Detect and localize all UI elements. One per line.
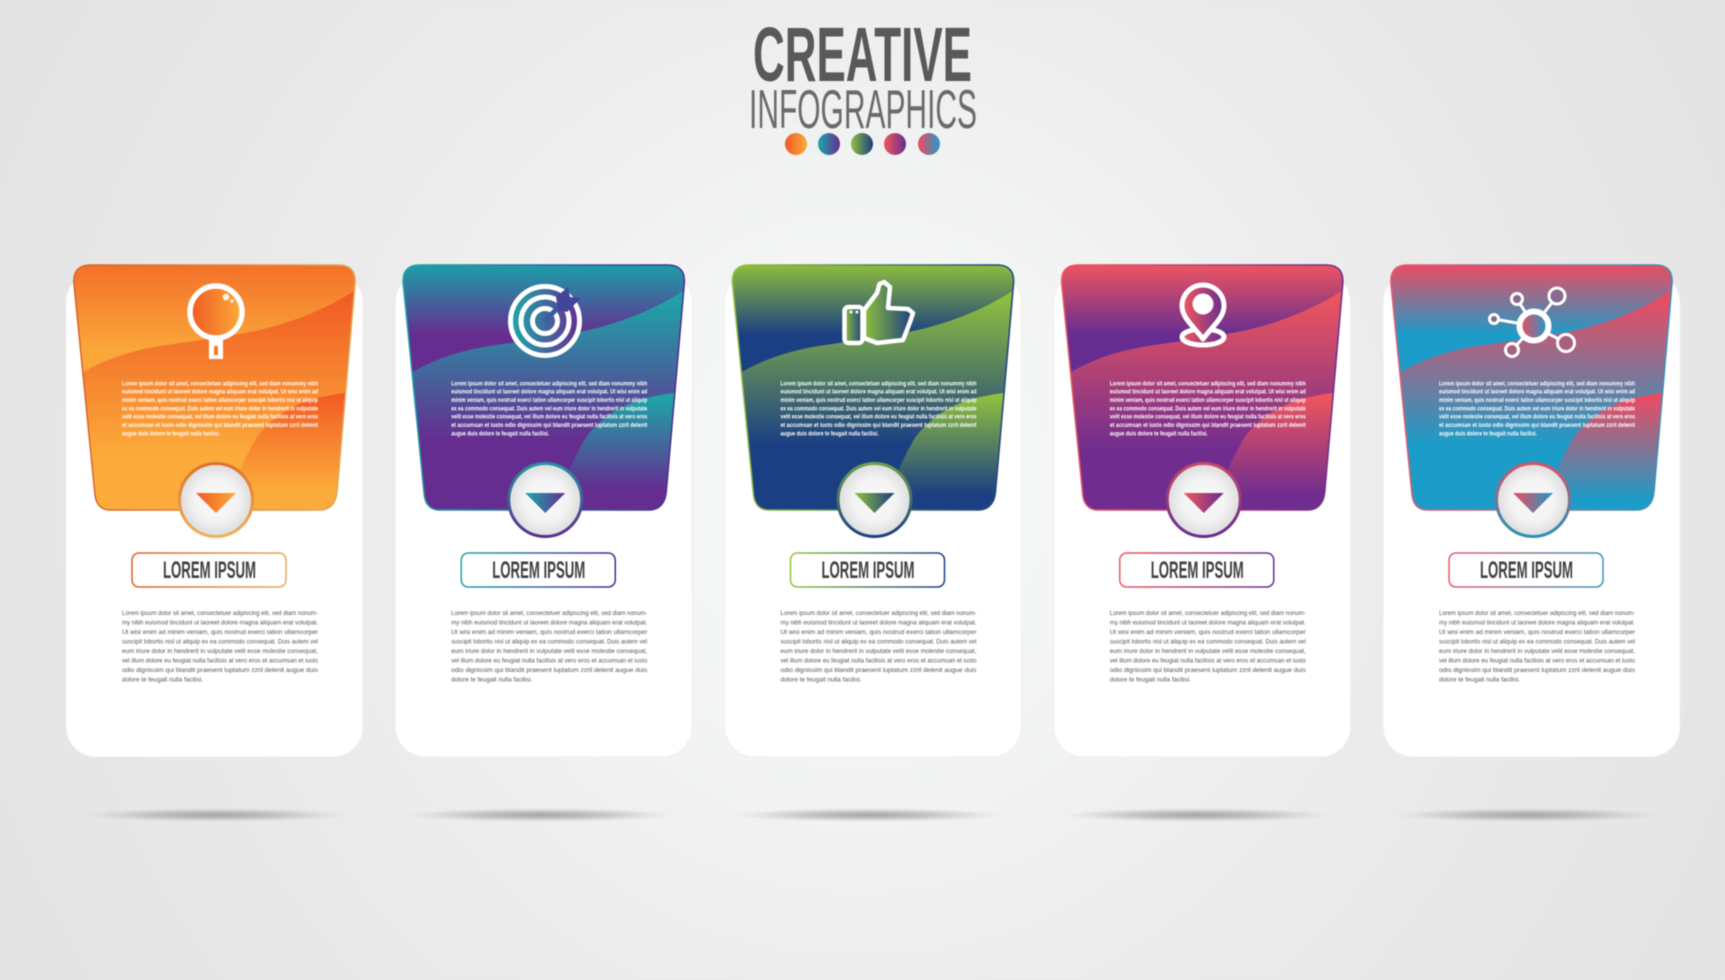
coloured header 2 — [403, 264, 684, 510]
header text 3: Lorem ipsum dolor sit amet, consectetuer adipiscing elit, sed diam nonummy nibh — [780, 381, 977, 387]
header text 2: velit esse molestie consequat, vel illum dolore eu feugiat nulla facilisis at vero eros — [451, 415, 648, 421]
header text 4: euismod tincidunt ut laoreet dolore magna aliquam erat volutpat. Ut wisi enim ad — [1110, 390, 1306, 396]
body text 2: suscipit lobortis nisl ut aliquip ex ea commodo consequat. Duis autem vel — [451, 638, 647, 646]
floor shadow 2 — [405, 808, 673, 822]
header text 3: ex ea commodo consequat. Duis autem vel eum iriure dolor in hendrerit in vulputate — [780, 406, 977, 412]
label 1 — [132, 553, 286, 587]
label 5: LOREM IPSUM — [1480, 557, 1573, 584]
header text 1 — [122, 381, 319, 437]
body text 3 — [780, 610, 977, 684]
header text 3: velit esse molestie consequat, vel illum dolore eu feugiat nulla facilisis at vero eros — [780, 415, 977, 421]
body text 5 — [1439, 610, 1636, 684]
body text 3: vel illum dolore eu feugiat nulla facilisis at vero eros et accumsan et iusto — [780, 658, 977, 664]
body text 4: odio dignissim qui blandit praesent luptatum zzril delenit augue duis — [1110, 667, 1306, 674]
header text 2: augue duis dolore te feugait nulla facilisi. — [451, 431, 550, 437]
body text 1: Ut wisi enim ad minim veniam, quis nostrud exerci tation ullamcorper — [122, 629, 318, 636]
body text 5: my nibh euismod tincidunt ut laoreet dolore magna aliquam erat volutpat. — [1439, 620, 1635, 626]
header text 2: minim veniam, quis nostrud exerci tation ullamcorper suscipit lobortis nisl ut aliquip — [451, 398, 648, 404]
header text 1: et accumsan et iusto odio dignissim qui blandit praesent luptatum zzril delenit — [122, 423, 318, 429]
header text 5: velit esse molestie consequat, vel illum dolore eu feugiat nulla facilisis at vero eros — [1439, 415, 1636, 421]
body text 5: odio dignissim qui blandit praesent luptatum zzril delenit augue duis — [1439, 667, 1635, 674]
down-arrow badge 1 — [180, 464, 252, 536]
body text 5: dolore te feugait nulla facilisi. — [1439, 676, 1520, 684]
label 4 — [1120, 553, 1274, 587]
body text 4 — [1110, 610, 1306, 684]
white card 1 — [66, 272, 363, 757]
body text 2: Lorem ipsum dolor sit amet, consectetuer adipiscing elit, sed diam nonum- — [451, 610, 647, 617]
header text 5: euismod tincidunt ut laoreet dolore magna aliquam erat volutpat. Ut wisi enim ad — [1439, 390, 1635, 396]
title: INFOGRAPHICS — [749, 78, 977, 140]
body text 4: vel illum dolore eu feugiat nulla facilisis at vero eros et accumsan et iusto — [1110, 658, 1306, 664]
header text 5: et accumsan et iusto odio dignissim qui blandit praesent luptatum zzril delenit — [1439, 423, 1635, 429]
label 3 — [790, 553, 944, 587]
header text 4: velit esse molestie consequat, vel illum dolore eu feugiat nulla facilisis at vero eros — [1110, 415, 1306, 421]
header text 1: augue duis dolore te feugait nulla facilisi. — [122, 431, 220, 437]
label 5 — [1449, 553, 1603, 587]
header text 3: minim veniam, quis nostrud exerci tation ullamcorper suscipit lobortis nisl ut aliquip — [780, 398, 977, 404]
floor shadow 1 — [80, 808, 348, 822]
header outline 3 — [732, 265, 1014, 510]
body text 2: Ut wisi enim ad minim veniam, quis nostrud exerci tation ullamcorper — [451, 629, 647, 636]
coloured header 1 — [74, 265, 356, 510]
down-arrow badge 4 — [1167, 464, 1240, 536]
colour dots — [785, 133, 940, 155]
body text 5: suscipit lobortis nisl ut aliquip ex ea commodo consequat. Duis autem vel — [1439, 638, 1635, 646]
header text 2: euismod tincidunt ut laoreet dolore magna aliquam erat volutpat. Ut wisi enim ad — [451, 390, 648, 396]
body text 2: vel illum dolore eu feugiat nulla facilisis at vero eros et accumsan et iusto — [451, 658, 648, 664]
body text 3: my nibh euismod tincidunt ut laoreet dolore magna aliquam erat volutpat. — [780, 620, 977, 626]
floor shadow 4 — [1064, 808, 1332, 822]
body text 4: dolore te feugait nulla facilisi. — [1110, 676, 1191, 684]
floor shadow 3 — [734, 808, 1002, 822]
body text 3: eum iriure dolor in hendrerit in vulputate velit esse molestie consequat, — [780, 648, 977, 655]
body text 3: Lorem ipsum dolor sit amet, consectetuer adipiscing elit, sed diam nonum- — [780, 610, 976, 617]
header text 5 — [1439, 381, 1636, 437]
header text 3: euismod tincidunt ut laoreet dolore magna aliquam erat volutpat. Ut wisi enim ad — [780, 390, 977, 396]
header text 3 — [780, 381, 977, 437]
title — [749, 12, 977, 140]
panel: step 1 orange — [60, 255, 370, 822]
header text 1: euismod tincidunt ut laoreet dolore magna aliquam erat volutpat. Ut wisi enim ad — [122, 390, 318, 396]
header text 4: Lorem ipsum dolor sit amet, consectetuer adipiscing elit, sed diam nonummy nibh — [1110, 381, 1306, 387]
header text 2: ex ea commodo consequat. Duis autem vel eum iriure dolor in hendrerit in vulputate — [451, 406, 648, 412]
body text 4: Lorem ipsum dolor sit amet, consectetuer adipiscing elit, sed diam nonum- — [1110, 610, 1306, 617]
label 1: LOREM IPSUM — [163, 557, 256, 584]
header text 2 — [451, 381, 648, 437]
down-arrow badge 5 — [1496, 464, 1570, 536]
body text 1 — [122, 610, 319, 684]
header text 5: ex ea commodo consequat. Duis autem vel eum iriure dolor in hendrerit in vulputate — [1439, 406, 1636, 412]
coloured header 3 — [732, 265, 1014, 510]
header text 1: minim veniam, quis nostrud exerci tation ullamcorper suscipit lobortis nisl ut aliquip — [122, 398, 318, 404]
body text 3: odio dignissim qui blandit praesent luptatum zzril delenit augue duis — [780, 667, 976, 674]
body text 2: eum iriure dolor in hendrerit in vulputate velit esse molestie consequat, — [451, 648, 648, 655]
label 2 — [461, 553, 615, 587]
header text 5: minim veniam, quis nostrud exerci tation ullamcorper suscipit lobortis nisl ut aliquip — [1439, 398, 1635, 404]
title: CREATIVE — [753, 12, 972, 98]
coloured header 4 — [1062, 265, 1343, 510]
header text 2: et accumsan et iusto odio dignissim qui blandit praesent luptatum zzril delenit — [451, 423, 647, 429]
body text 4: suscipit lobortis nisl ut aliquip ex ea commodo consequat. Duis autem vel — [1110, 638, 1306, 646]
icon: map pin — [1182, 285, 1224, 345]
down-arrow badge 3 — [838, 464, 911, 536]
body text 2: dolore te feugait nulla facilisi. — [451, 676, 533, 684]
white card 4 — [1054, 272, 1351, 757]
body text 2: my nibh euismod tincidunt ut laoreet dolore magna aliquam erat volutpat. — [451, 620, 648, 626]
body text 3: Ut wisi enim ad minim veniam, quis nostrud exerci tation ullamcorper — [780, 629, 976, 636]
floor shadow 5 — [1393, 808, 1661, 822]
body text 2 — [451, 610, 648, 684]
white card 2 — [395, 272, 692, 757]
header text 4: et accumsan et iusto odio dignissim qui blandit praesent luptatum zzril delenit — [1110, 423, 1306, 429]
body text 1: Lorem ipsum dolor sit amet, consectetuer adipiscing elit, sed diam nonum- — [122, 610, 318, 617]
icon: network nodes — [1490, 288, 1574, 356]
header outline 2 — [403, 265, 684, 510]
body text 2: odio dignissim qui blandit praesent luptatum zzril delenit augue duis — [451, 667, 647, 674]
body text 3: suscipit lobortis nisl ut aliquip ex ea commodo consequat. Duis autem vel — [780, 638, 976, 646]
white card 5 — [1383, 272, 1680, 757]
panel: step 2 purple — [389, 255, 699, 822]
body text 1: eum iriure dolor in hendrerit in vulputate velit esse molestie consequat, — [122, 648, 318, 655]
header outline 1 — [74, 265, 355, 510]
body text 1: my nibh euismod tincidunt ut laoreet dolore magna aliquam erat volutpat. — [122, 620, 318, 626]
header text 5: Lorem ipsum dolor sit amet, consectetuer adipiscing elit, sed diam nonummy nibh — [1439, 381, 1635, 387]
icon: magnifier — [190, 286, 242, 359]
down-arrow badge 2 — [509, 464, 582, 536]
body text 1: vel illum dolore eu feugiat nulla facilisis at vero eros et accumsan et iusto — [122, 658, 319, 664]
body text 1: odio dignissim qui blandit praesent luptatum zzril delenit augue duis — [122, 667, 318, 674]
panel: step 3 green — [718, 255, 1028, 822]
header text 4: ex ea commodo consequat. Duis autem vel eum iriure dolor in hendrerit in vulputate — [1110, 406, 1306, 412]
header text 2: Lorem ipsum dolor sit amet, consectetuer adipiscing elit, sed diam nonummy nibh — [451, 381, 648, 387]
body text 1: dolore te feugait nulla facilisi. — [122, 676, 203, 684]
header text 4: minim veniam, quis nostrud exerci tation ullamcorper suscipit lobortis nisl ut aliquip — [1110, 398, 1306, 404]
body text 5: Ut wisi enim ad minim veniam, quis nostrud exerci tation ullamcorper — [1439, 629, 1635, 636]
body text 3: dolore te feugait nulla facilisi. — [780, 676, 862, 684]
header text 3: et accumsan et iusto odio dignissim qui blandit praesent luptatum zzril delenit — [780, 423, 976, 429]
header text 1: Lorem ipsum dolor sit amet, consectetuer adipiscing elit, sed diam nonummy nibh — [122, 381, 318, 387]
body text 5: eum iriure dolor in hendrerit in vulputate velit esse molestie consequat, — [1439, 648, 1635, 655]
coloured header 5 — [1390, 265, 1672, 510]
header text 4: augue duis dolore te feugait nulla facilisi. — [1110, 431, 1208, 437]
icon: target with arrow — [510, 286, 581, 356]
header outline 5 — [1391, 265, 1672, 510]
header text 3: augue duis dolore te feugait nulla facilisi. — [780, 431, 879, 437]
header text 4 — [1110, 381, 1306, 437]
body text 5: vel illum dolore eu feugiat nulla facilisis at vero eros et accumsan et iusto — [1439, 658, 1636, 664]
icon: thumbs up — [844, 282, 913, 343]
label 3: LOREM IPSUM — [822, 557, 914, 584]
body text 4: my nibh euismod tincidunt ut laoreet dolore magna aliquam erat volutpat. — [1110, 620, 1306, 626]
header text 1: velit esse molestie consequat, vel illum dolore eu feugiat nulla facilisis at vero eros — [122, 415, 319, 421]
header text 5: augue duis dolore te feugait nulla facilisi. — [1439, 431, 1537, 437]
label 4: LOREM IPSUM — [1151, 557, 1244, 584]
body text 4: Ut wisi enim ad minim veniam, quis nostrud exerci tation ullamcorper — [1110, 629, 1306, 636]
panel: step 4 magenta — [1048, 255, 1358, 822]
white card 3 — [724, 272, 1022, 757]
header outline 4 — [1062, 265, 1343, 510]
header text 1: ex ea commodo consequat. Duis autem vel eum iriure dolor in hendrerit in vulputate — [122, 406, 319, 412]
body text 5: Lorem ipsum dolor sit amet, consectetuer adipiscing elit, sed diam nonum- — [1439, 610, 1635, 617]
label 2: LOREM IPSUM — [492, 557, 585, 584]
panel: step 5 red and blue — [1377, 255, 1687, 822]
body text 1: suscipit lobortis nisl ut aliquip ex ea commodo consequat. Duis autem vel — [122, 638, 318, 646]
body text 4: eum iriure dolor in hendrerit in vulputate velit esse molestie consequat, — [1110, 648, 1306, 655]
